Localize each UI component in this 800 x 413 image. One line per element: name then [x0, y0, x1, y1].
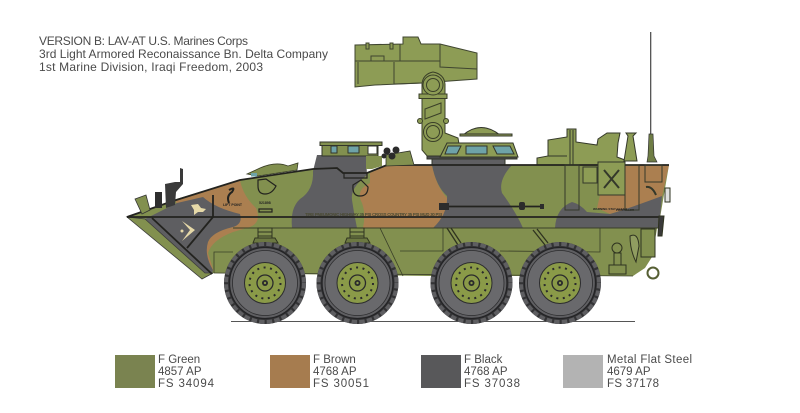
- stenciled markings: PROPELLER: [616, 208, 635, 212]
- legend: F Black: 4768 AP: [464, 366, 508, 378]
- ground line: [231, 320, 635, 322]
- legend: F Green: 4857 AP: [158, 366, 202, 378]
- hull green base: [127, 165, 669, 279]
- stenciled markings: LIFT POINT: [223, 203, 243, 207]
- legend: F Green: FS 34094: [158, 378, 215, 390]
- camo: front gray: [145, 197, 241, 274]
- legend: F Green: [115, 354, 215, 390]
- heading: version caption: [39, 34, 328, 74]
- legend: F Brown: F Brown: [313, 354, 356, 366]
- stenciled markings: 521898: [259, 201, 271, 205]
- antenna: [647, 32, 657, 162]
- legend: Metal Flat Steel: FS 37178: [607, 378, 659, 390]
- legend: F Black: FS 37038: [464, 378, 520, 390]
- turret cab: [427, 128, 518, 166]
- legend: Metal Flat Steel: Metal Flat Steel: [607, 354, 692, 366]
- roof hatch and mirror: [135, 163, 298, 214]
- legend: F Brown: FS 30051: [313, 378, 369, 390]
- legend: F Brown: 4768 AP: [313, 366, 357, 378]
- hull body: [127, 155, 669, 279]
- camo: mid brown: [360, 165, 447, 228]
- smoke grenade launcher: [382, 146, 414, 166]
- colour legend: [115, 354, 692, 390]
- missile launcher box: [355, 37, 477, 87]
- legend: F Black: F Black: [464, 354, 503, 366]
- road wheels: [224, 242, 601, 324]
- commander cupola: [320, 142, 382, 169]
- heading: version caption: 3rd Light Armored Reconaissance Bn. Delta Company: [39, 47, 328, 61]
- stenciled markings: [223, 201, 635, 217]
- rear deck equipment: [537, 129, 637, 165]
- legend: F Black: [421, 354, 520, 390]
- legend: Metal Flat Steel: [563, 354, 692, 390]
- rear light and tow hook: [609, 188, 670, 278]
- hatch circles and lift point: [228, 173, 368, 212]
- stenciled markings: TIRE PNEUMONIC HIGHWAY 35 PSI CROSS COUNTRY 35 PSI MUD 30 PSI: [305, 212, 442, 217]
- insignia: eagle and chevron: [180, 204, 206, 241]
- legend: Metal Flat Steel: 4679 AP: [607, 366, 651, 378]
- heading: version caption: VERSION B: LAV-AT U.S. Marines Corps: [39, 34, 248, 48]
- rear hull panels: [565, 162, 662, 210]
- camo: mid gray: [432, 165, 523, 228]
- camo: hull gray: [292, 155, 367, 228]
- lower nose strip: [127, 217, 213, 279]
- legend: F Green: F Green: [158, 354, 200, 366]
- camo: rear gray: [555, 196, 662, 228]
- camo: rear brown: [597, 165, 669, 214]
- roof and belt lines: [127, 165, 669, 276]
- illustration: LAV-AT vehicle: [127, 32, 670, 324]
- camo: front brown: [175, 180, 258, 272]
- launcher arm: [418, 72, 460, 157]
- stenciled markings: WARNING STAY CLEAR: [593, 207, 628, 211]
- suspension springs: [253, 228, 548, 245]
- main gun stowed rod: [439, 202, 544, 210]
- legend: F Brown: [270, 354, 369, 390]
- heading: version caption: 1st Marine Division, Iraqi Freedom, 2003: [39, 60, 263, 74]
